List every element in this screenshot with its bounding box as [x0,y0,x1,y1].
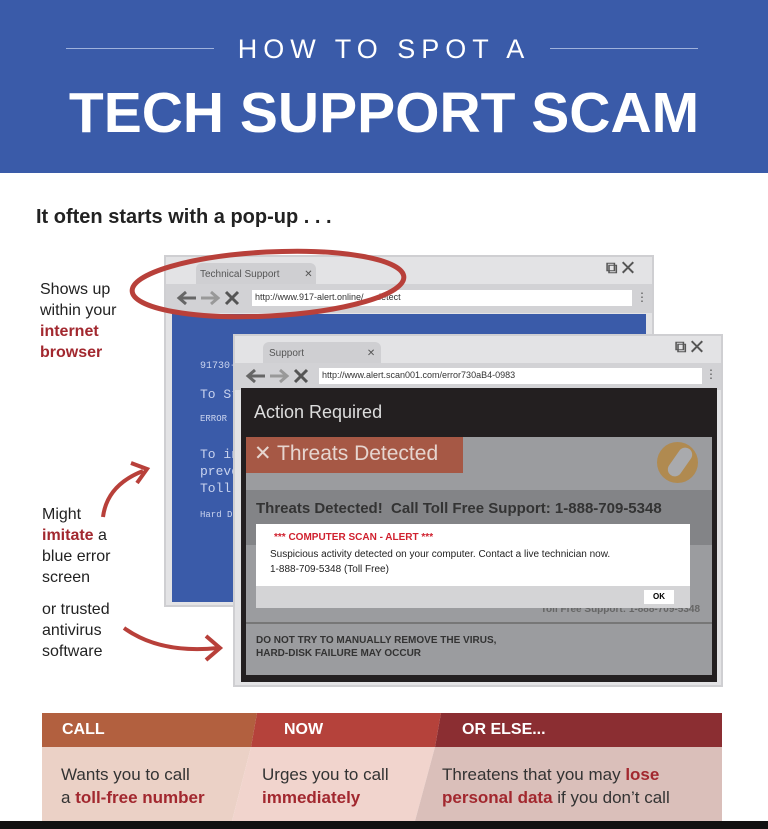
back browser: ⋮ [636,290,648,304]
back browser: ⧉ ✕ [606,260,634,277]
alert dialog: Suspicious activity detected on your computer. Contact a live technician now. [270,549,610,560]
bottom panel: call now or else: Threatens that you may lose [442,765,659,784]
text: imitate blue screen [42,506,110,586]
title: TECH SUPPORT SCAM [69,81,699,145]
header [0,0,768,173]
column: or else: OR ELSE... [462,721,546,738]
back browser: 91730- [200,361,236,372]
back browser: http://www.917-alert.online/ ... detect [255,292,401,302]
subtitle: HOW TO SPOT A [238,34,530,64]
scam popup: Toll Free Support: 1-888-709-5348 [541,604,700,615]
alert dialog [256,524,690,608]
text: shows up in browser: internet [40,323,99,340]
text: shows up in browser: within your [40,302,116,319]
text: imitate blue screen: blue error [42,548,110,565]
back browser: preve [200,464,239,479]
bottom panel: call now or else: Wants you to call [61,765,190,784]
alert dialog: OK [653,592,665,601]
back browser: Toll [200,481,231,496]
text: imitate blue screen: imitate a [42,527,107,544]
text: imitate blue screen: screen [42,569,90,586]
bottom panel: call now or else [42,713,722,821]
scam popup [241,388,717,682]
text: shows up in browser: browser [40,344,102,361]
bottom panel: call now or else: Urges you to call [262,765,389,784]
arrow: to blue screen [101,461,150,518]
red circle highlight [130,248,406,320]
back browser: Hard D [200,510,232,520]
alert dialog: *** COMPUTER SCAN - ALERT *** [274,532,433,543]
text: antivirus: antivirus [42,622,102,639]
text: shows up in browser: Shows up [40,281,110,298]
alert dialog: 1-888-709-5348 (Toll Free) [270,564,389,575]
front browser: Support ✕ [269,348,375,359]
threats badge [246,437,463,473]
column: now: NOW [284,721,323,738]
text: antivirus: or trusted [42,601,110,618]
back browser: To in [200,447,239,462]
scam popup: DO NOT TRY TO MANUALLY REMOVE THE VIRUS, [256,635,496,646]
scam popup: HARD-DISK FAILURE MAY OCCUR [256,648,421,659]
text: imitate blue screen: Might [42,506,81,523]
intro heading: It often starts with a pop-up . . . [36,206,332,228]
icon: nav buttons [176,291,239,305]
scam popup: Threats Detected! Call Toll Free Support: 1-888-709-5348 [256,500,662,517]
back browser: Technical Support ✕ [200,269,313,280]
back browser [164,255,654,607]
front browser: ⋮ [705,367,717,381]
threats badge: ✕ Threats Detected [254,442,438,465]
arrow: to antivirus [122,626,223,662]
text: antivirus [42,601,110,660]
front browser: http://www.alert.scan001.com/error730aB4-0983 [322,370,515,380]
front browser [233,334,723,687]
back browser: To St [200,387,239,402]
scam popup: Action Required [254,402,382,422]
column: call: CALL [62,721,105,738]
bottom panel: call now or else: personal data if you don’t call [442,788,670,807]
front browser: ⧉ ✕ [675,339,703,356]
icon: shield check [657,442,698,483]
bottom panel: call now or else: a toll-free number [61,788,205,807]
text: shows up in browser [40,281,116,361]
back browser: ERROR [200,414,227,424]
icon: nav buttons [246,369,308,383]
text: antivirus: software [42,643,102,660]
bottom panel: call now or else: immediately [262,788,360,807]
